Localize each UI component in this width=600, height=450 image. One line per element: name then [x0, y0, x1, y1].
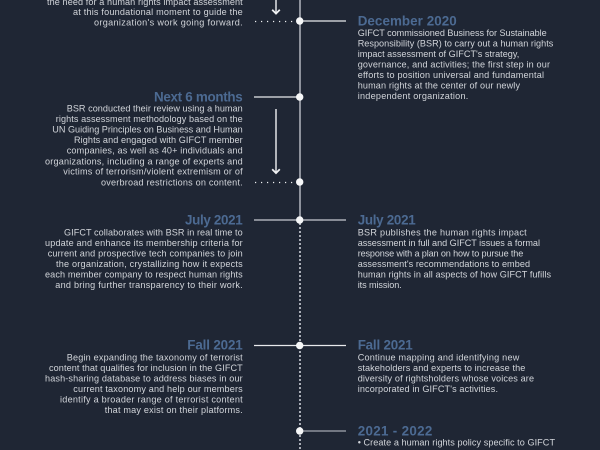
body text: its mission. — [358, 280, 402, 290]
body text: governance, and activities; the first step in our — [358, 60, 550, 70]
panel: july 2021 left — [45, 213, 243, 290]
body text: each member company to respect human rights — [45, 270, 243, 280]
arrow: next 6 months down arrow — [272, 109, 280, 173]
text block: assessment intro: organization's work going forward. — [94, 18, 243, 28]
body text: that may exist on their platforms. — [105, 405, 243, 415]
body text — [45, 227, 243, 290]
body text: BSR publishes the human rights impact — [358, 227, 527, 237]
body text: hash-sharing database to address biases in our — [45, 374, 243, 384]
body text: victims of terrorism/violent extremism or of — [63, 167, 243, 177]
text block: assessment intro: at this foundational moment to guide the — [73, 7, 243, 17]
body text: impact assessment of GIFCT's strategy, — [358, 49, 519, 59]
body text: assessment in full and GIFCT issues a formal — [358, 238, 540, 248]
panel: 2021 - 2022 — [358, 424, 555, 448]
connectors — [254, 21, 346, 431]
body text: organizations, including a range of experts and — [45, 156, 243, 166]
body text: UN Guiding Principles on Business and Human — [52, 125, 243, 135]
body text: GIFCT collaborates with BSR in real time to — [64, 227, 243, 237]
body text: rights assessment methodology based on the — [56, 114, 243, 124]
body text: incorporated in GIFCT's activities. — [358, 384, 498, 394]
body text: human rights at the center of our newly — [358, 80, 520, 90]
body text: stakeholders and experts to increase the — [358, 363, 525, 373]
body text: update and enhance its membership criteria for — [45, 238, 243, 248]
body text — [45, 104, 243, 187]
body text: and bring further transparency to their work. — [55, 280, 243, 290]
body text: GIFCT commissioned Business for Sustainable — [358, 28, 547, 38]
body text: the organization, crystallizing how it expects — [56, 259, 243, 269]
body text: independent organization. — [358, 91, 468, 101]
body text: Begin expanding the taxonomy of terrorist — [67, 352, 243, 362]
body text: BSR conducted their review using a human — [67, 104, 243, 114]
heading: July 2021 — [185, 213, 243, 228]
timeline nodes — [296, 17, 303, 435]
panel: december 2020 — [358, 14, 554, 101]
body text: companies, as well as 40+ individuals and — [67, 146, 243, 156]
body text: identify a broader range of terrorist content — [60, 394, 243, 404]
panel: fall 2021 right — [358, 338, 534, 394]
body text: Responsibility (BSR) to carry out a human rights — [358, 38, 554, 48]
heading: December 2020 — [358, 14, 457, 29]
body text: current and prospective tech companies to join — [48, 248, 243, 258]
heading: Fall 2021 — [358, 338, 413, 353]
arrow: top down arrow — [272, 0, 280, 14]
body text: current taxonomy and help our members — [73, 384, 243, 394]
body text: overbroad restrictions on content. — [101, 177, 243, 187]
body text — [45, 352, 243, 415]
body text: response with a plan on how to pursue the — [358, 248, 523, 258]
body text: diversity of rightsholders whose voices are — [358, 374, 534, 384]
body text: human rights in all aspects of how GIFCT fufills — [358, 270, 551, 280]
body text — [358, 352, 534, 394]
body text: Continue mapping and identifying new — [358, 352, 520, 362]
body text — [358, 227, 551, 290]
body text: assessment's recommendations to embed — [358, 259, 530, 269]
heading: Fall 2021 — [187, 338, 243, 353]
panel: july 2021 right — [358, 213, 551, 290]
panel: fall 2021 left — [45, 338, 243, 415]
heading: 2021 - 2022 — [358, 424, 432, 439]
text block: assessment intro — [47, 0, 243, 28]
heading: Next 6 months — [154, 90, 243, 105]
timeline spine — [299, 0, 301, 450]
body text: content that qualifies for inclusion in the GIFCT — [49, 363, 243, 373]
body text: • Create a human rights policy specific to GIFCT — [358, 438, 555, 448]
body text: Rights and engaged with GIFCT member — [74, 135, 243, 145]
body text — [358, 28, 554, 101]
panel: next 6 months — [45, 90, 243, 187]
heading: July 2021 — [358, 213, 416, 228]
body text: efforts to position universal and fundamental — [358, 70, 544, 80]
